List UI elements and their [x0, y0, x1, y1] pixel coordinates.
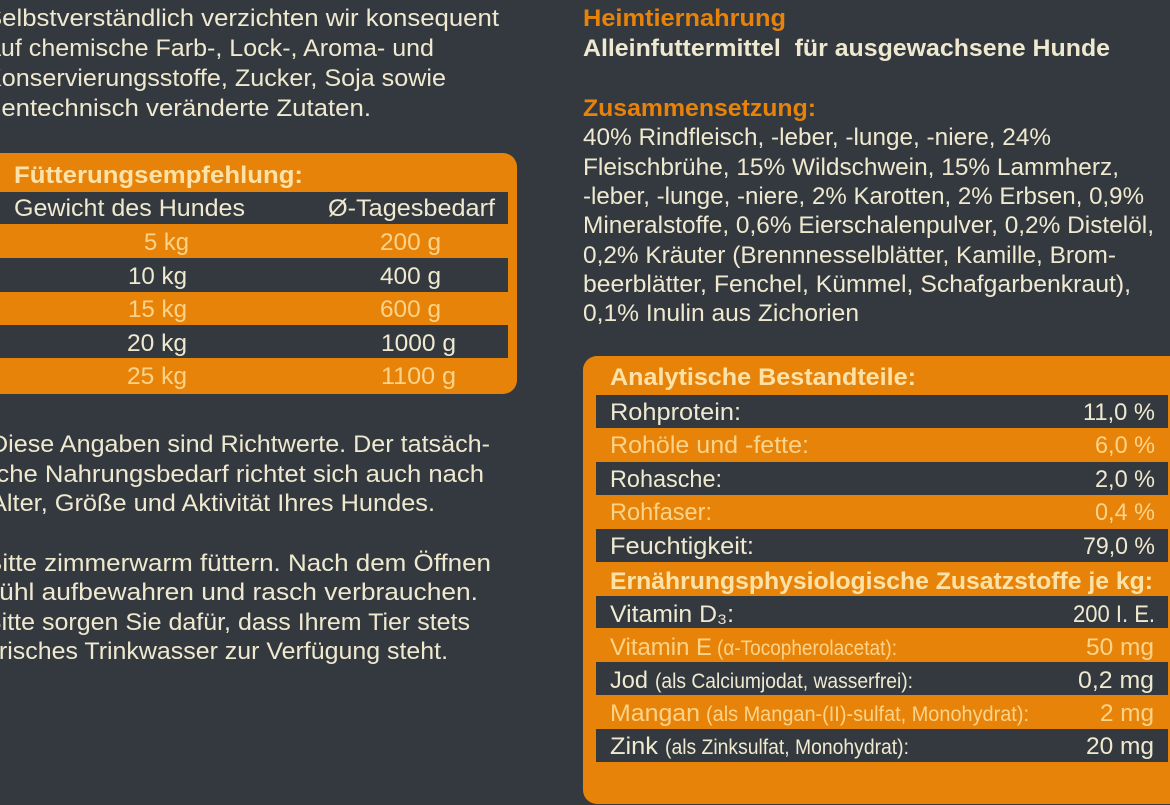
- table header row: Ø-Tagesbedarf: [328, 195, 495, 222]
- row: Vitamin E: [610, 634, 1154, 661]
- table header row: [0, 192, 508, 224]
- row: Rohasche: 2,0 %: [1095, 466, 1155, 493]
- row: Rohfaser: 0,4 %: [1095, 499, 1155, 526]
- text block: guideline note: [0, 431, 490, 517]
- row: Vitamin E: (α-Tocopherolacetat):: [717, 637, 897, 660]
- text block: composition: [583, 124, 1154, 327]
- row: 25 kg: [127, 363, 456, 390]
- row: Jod: (als Calciumjodat, wasserfrei):: [655, 670, 913, 693]
- text block: storage advice: frisches Trinkwasser zur Verfügung steht.: [0, 638, 448, 665]
- row: Rohasche: [596, 462, 1168, 495]
- row: Vitamin D3: 200 I. E.: [1073, 601, 1155, 628]
- row: Rohöle und -fette: Rohöle und -fette:: [610, 432, 809, 459]
- row: Mangan: [610, 700, 1154, 727]
- row: 10 kg: 400 g: [380, 263, 441, 290]
- heading: product type: Alleinfuttermittel für ausgewachsene Hunde: [583, 35, 1110, 62]
- row: Zink: (als Zinksulfat, Monohydrat):: [665, 736, 909, 759]
- text block: composition: 40% Rindfleisch, -leber, -lunge, -niere, 24%: [583, 124, 1051, 151]
- row: Rohasche: Rohasche:: [610, 466, 722, 493]
- row: 10 kg: [0, 258, 508, 292]
- row: Vitamin D3: Vitamin D₃:: [610, 601, 734, 628]
- heading: Analytische Bestandteile: Analytische Bestandteile:: [610, 364, 916, 391]
- text block: guideline note: Alter, Größe und Aktivität Ihres Hundes.: [0, 490, 435, 517]
- heading: nutritional additives: Ernährungsphysiologische Zusatzstoffe je kg:: [610, 568, 1153, 595]
- heading: product type: Heimtiernahrung: [583, 5, 786, 32]
- row: Feuchtigkeit: [596, 529, 1168, 562]
- row: Jod: 0,2 mg: [1078, 667, 1154, 694]
- heading: Zusammensetzung: Zusammensetzung:: [583, 95, 816, 122]
- row: Rohfaser: Rohfaser:: [610, 499, 712, 526]
- row: 10 kg: 10 kg: [128, 263, 187, 290]
- row: Jod: [596, 662, 1168, 695]
- row: 25 kg: 25 kg: [127, 363, 187, 390]
- panel: feeding recommendation: [0, 153, 517, 394]
- row: Vitamin E: Vitamin E: [610, 634, 712, 661]
- row: 15 kg: 15 kg: [128, 296, 187, 323]
- row: Zink: Zink: [610, 733, 659, 760]
- row: 20 kg: 1000 g: [381, 330, 456, 357]
- row: Jod: Jod: [610, 667, 648, 694]
- row: 5 kg: [144, 229, 441, 256]
- row: Mangan: 2 mg: [1100, 700, 1154, 727]
- row: Vitamin E: 50 mg: [1086, 634, 1154, 661]
- row: Mangan: Mangan: [610, 700, 700, 727]
- row: Rohprotein: [596, 395, 1168, 428]
- text block: composition: Mineralstoffe, 0,6% Eierschalenpulver, 0,2% Distelöl,: [583, 212, 1154, 239]
- text block: ingredient exclusions: [0, 5, 499, 122]
- text block: storage advice: [0, 550, 491, 665]
- panel: analytical constituents and additives: [583, 356, 1170, 804]
- row: Mangan: (als Mangan-(II)-sulfat, Monohydrat):: [706, 703, 1029, 726]
- row: 25 kg: 1100 g: [381, 363, 456, 390]
- table header row: Gewicht des Hundes: [14, 195, 245, 222]
- text block: composition: 0,2% Kräuter (Brennnesselblätter, Kamille, Brom-: [583, 242, 1116, 269]
- row: Rohprotein: Rohprotein:: [610, 399, 741, 426]
- text block: composition: 0,1% Inulin aus Zichorien: [583, 300, 859, 327]
- row: Rohfaser: [610, 499, 1155, 526]
- text block: composition: beerblätter, Fenchel, Kümmel, Schafgarbenkraut),: [583, 271, 1131, 298]
- row: Feuchtigkeit: 79,0 %: [1083, 533, 1155, 560]
- row: 20 kg: 20 kg: [127, 330, 187, 357]
- row: Zink: [596, 729, 1168, 762]
- row: 20 kg: [0, 325, 508, 358]
- row: Feuchtigkeit: Feuchtigkeit:: [610, 533, 754, 560]
- text block: composition: Fleischbrühe, 15% Wildschwein, 15% Lammherz,: [583, 154, 1119, 181]
- row: 15 kg: [128, 296, 441, 323]
- text block: guideline note: Diese Angaben sind Richtwerte. Der tatsäch-: [0, 431, 490, 458]
- row: Rohöle und -fette: [610, 432, 1155, 459]
- heading: product type: [583, 5, 1110, 62]
- row: Zink: 20 mg: [1086, 733, 1154, 760]
- heading: Fütterungsempfehlung: Fütterungsempfehlung:: [14, 162, 303, 189]
- row: 5 kg: 200 g: [380, 229, 441, 256]
- row: 15 kg: 600 g: [380, 296, 441, 323]
- row: Rohprotein: 11,0 %: [1083, 399, 1155, 426]
- text block: composition: -leber, -lunge, -niere, 2% Karotten, 2% Erbsen, 0,9%: [583, 183, 1144, 210]
- row: 5 kg: 5 kg: [144, 229, 189, 256]
- row: Rohöle und -fette: 6,0 %: [1095, 432, 1155, 459]
- row: Vitamin D3: [596, 596, 1168, 628]
